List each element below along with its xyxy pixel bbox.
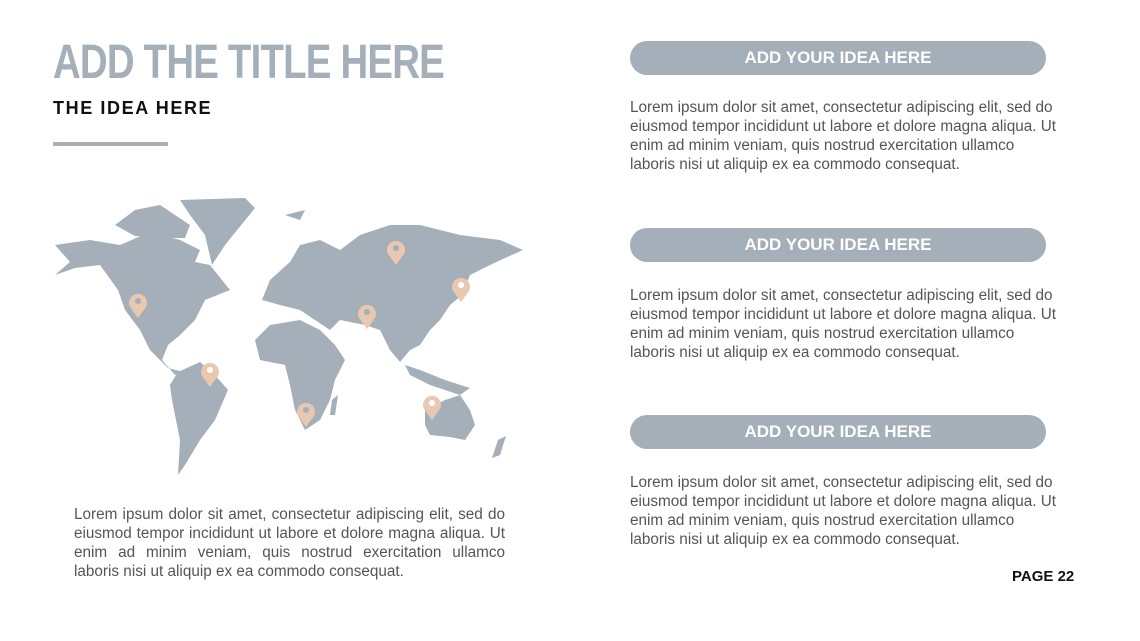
- accent bar: [53, 142, 168, 146]
- paragraph 2: Lorem ipsum dolor sit amet, consectetur adipiscing elit, sed do eiusmod tempor incididunt ut labore et dolore magna aliqua. Ut enim ad minim veniam, quis nostrud exercitation ullamco laboris nisi ut aliquip ex ea commodo consequat.: [630, 287, 1056, 361]
- pill 1: [630, 41, 1046, 75]
- pill 3: ADD YOUR IDEA HERE: [744, 422, 932, 441]
- icon: location pins: [129, 241, 470, 427]
- pill 3: [630, 415, 1046, 449]
- page number: PAGE 22: [1012, 568, 1074, 585]
- title: ADD THE TITLE HERE: [53, 36, 444, 89]
- pill 2: ADD YOUR IDEA HERE: [744, 235, 932, 254]
- subtitle: THE IDEA HERE: [53, 98, 212, 118]
- paragraph 3: Lorem ipsum dolor sit amet, consectetur adipiscing elit, sed do eiusmod tempor incididunt ut labore et dolore magna aliqua. Ut enim ad minim veniam, quis nostrud exercitation ullamco laboris nisi ut aliquip ex ea commodo consequat.: [630, 474, 1056, 548]
- paragraph 1: Lorem ipsum dolor sit amet, consectetur adipiscing elit, sed do eiusmod tempor incididunt ut labore et dolore magna aliqua. Ut enim ad minim veniam, quis nostrud exercitation ullamco laboris nisi ut aliquip ex ea commodo consequat.: [630, 99, 1056, 173]
- world map: [55, 198, 523, 475]
- left paragraph: Lorem ipsum dolor sit amet, consectetur adipiscing elit, sed do eiusmod tempor incididunt ut labore et dolore magna aliqua. Ut enim ad minim veniam, quis nostrud exercitation ullamco laboris nisi ut aliquip ex ea commodo consequat.: [74, 506, 505, 580]
- pill 2: [630, 228, 1046, 262]
- pill 1: ADD YOUR IDEA HERE: [744, 48, 932, 67]
